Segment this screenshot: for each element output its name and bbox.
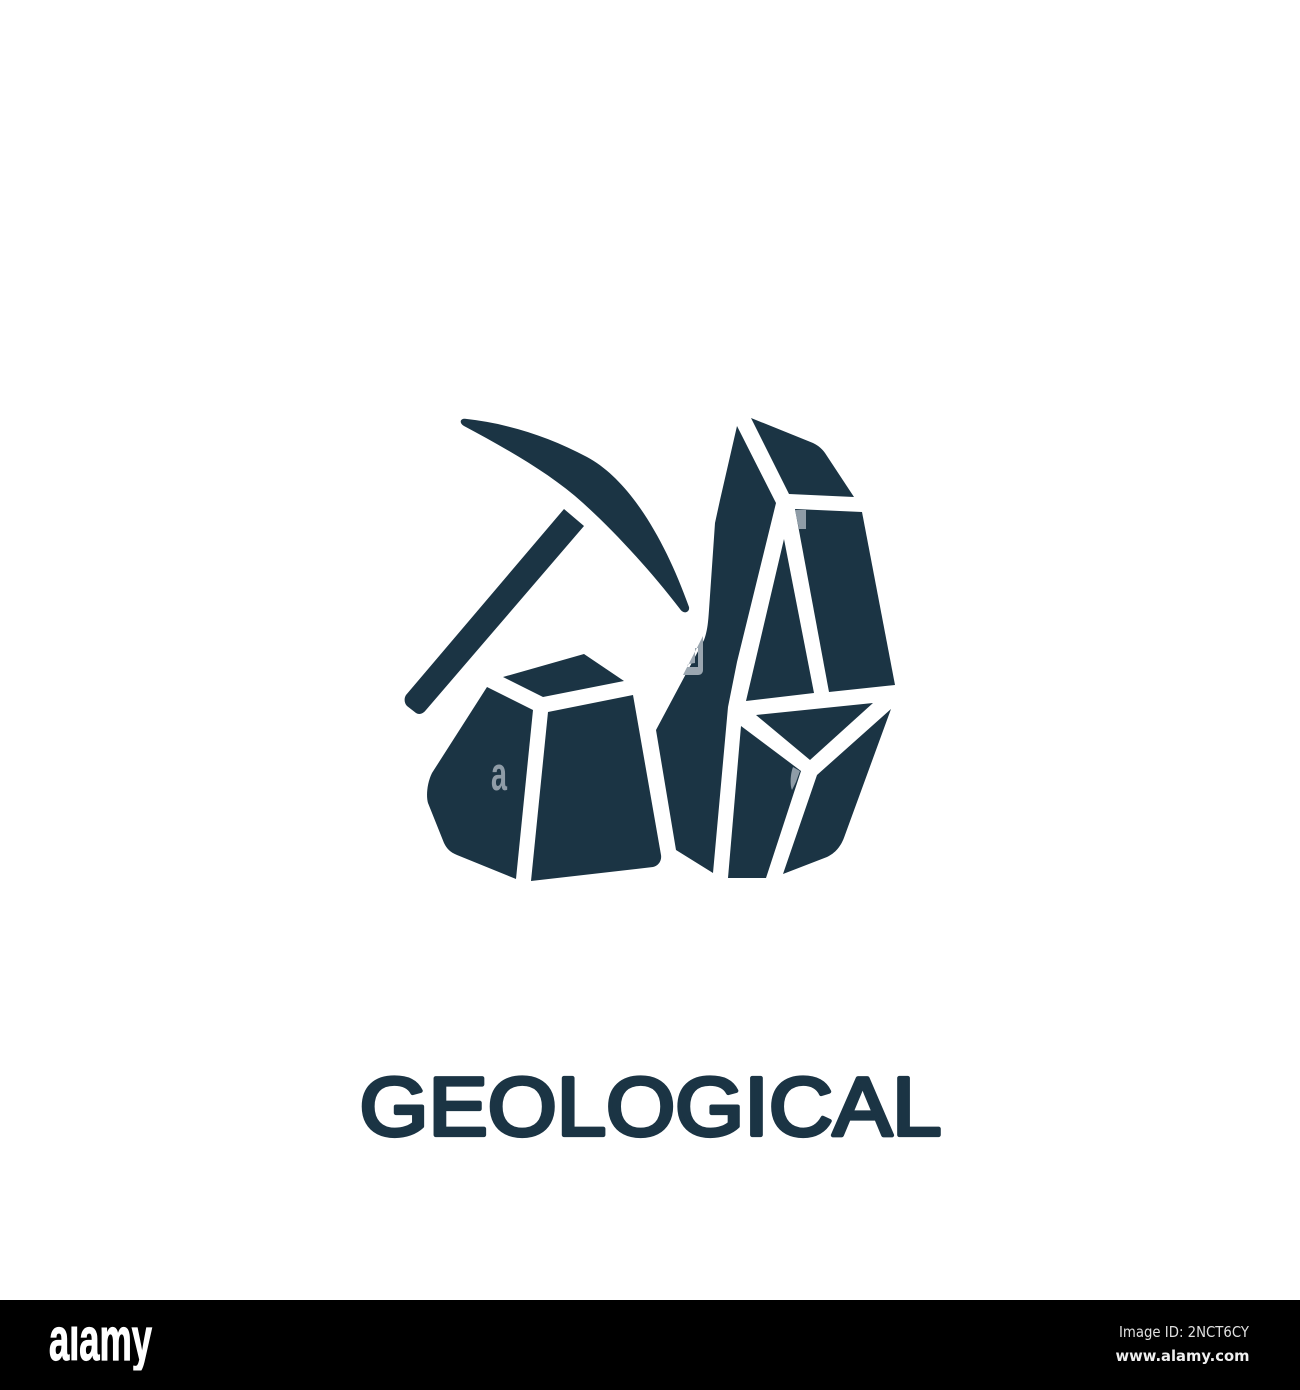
icon: lower crystal top face [756, 703, 873, 760]
icon: tall crystal left face [656, 426, 776, 873]
icon: tall crystal top face [751, 418, 854, 497]
watermark fragment: letter on small rock: a [491, 747, 508, 800]
icon: lower crystal left face [728, 726, 801, 878]
footer image id: Image ID: 2NCT6CY [1119, 1323, 1250, 1341]
watermark fragment: lower crystal [791, 767, 800, 790]
title: GEOLOGICAL [360, 1060, 942, 1153]
watermark fragment: crystal right face [795, 510, 806, 529]
icon: small rock front face [531, 695, 661, 881]
icon: small rock left face [427, 687, 533, 879]
footer website: www.alamy.com [1116, 1347, 1250, 1365]
icon: tall crystal right face [795, 509, 895, 692]
icon: small rock top face [503, 654, 624, 697]
icon: lower crystal right face [783, 709, 891, 874]
icon: pickaxe handle [405, 509, 584, 714]
watermark fragment: beside tall crystal [683, 636, 703, 675]
infographic canvas [0, 418, 1300, 1390]
icon: geological pickaxe and rocks [405, 418, 895, 881]
icon: pickaxe head [461, 419, 689, 612]
footer logo: alamy [49, 1306, 152, 1373]
icon: tall crystal middle face [746, 539, 814, 701]
footer bar [0, 1300, 1300, 1390]
